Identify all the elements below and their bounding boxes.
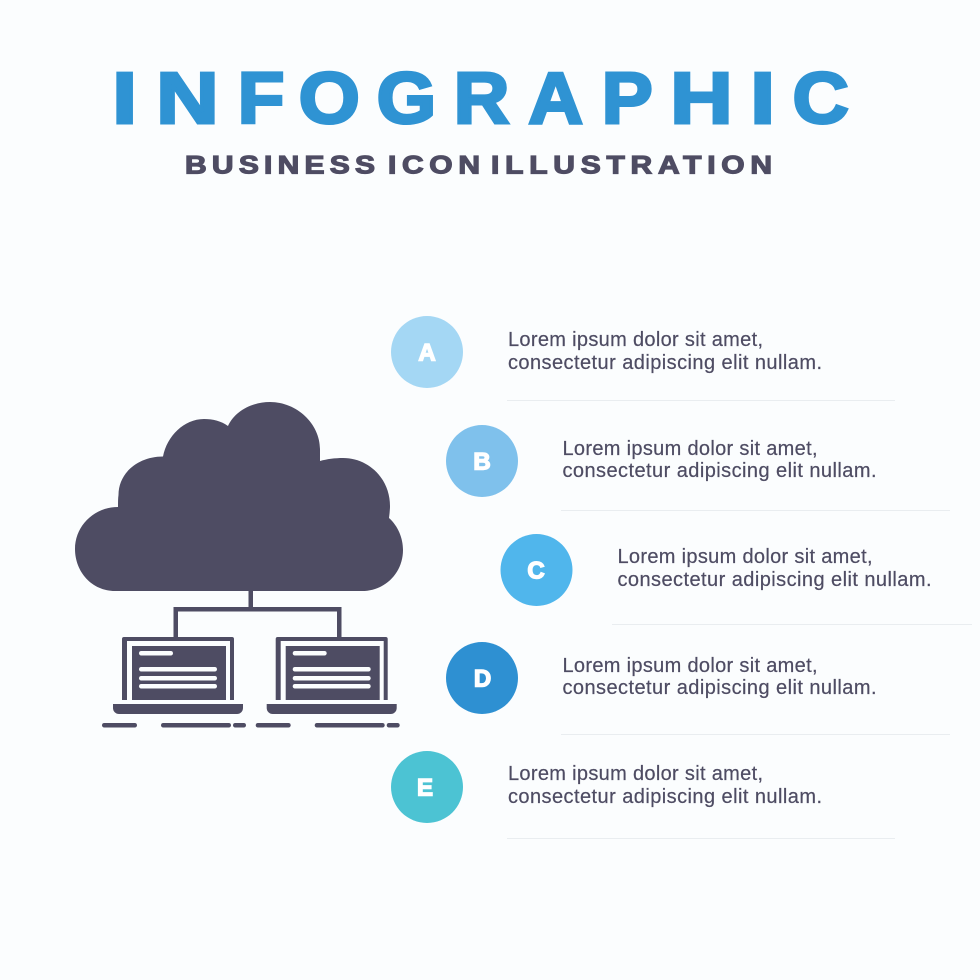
item B: consectetur adipiscing elit nullam. xyxy=(562,460,876,482)
item B xyxy=(446,425,950,511)
item C: consectetur adipiscing elit nullam. xyxy=(618,569,932,591)
item D xyxy=(446,642,950,735)
icon: cloud network with two laptops xyxy=(75,402,403,728)
item B: B xyxy=(473,448,491,476)
item E: consectetur adipiscing elit nullam. xyxy=(508,786,822,808)
item C xyxy=(500,534,972,625)
subtitle: ILLUSTRATION xyxy=(491,151,772,179)
item D: D xyxy=(474,666,491,692)
item B: Lorem ipsum dolor sit amet, xyxy=(562,438,818,460)
title: N xyxy=(156,58,219,138)
title xyxy=(112,58,849,139)
laptop: left xyxy=(102,637,246,728)
item A: Lorem ipsum dolor sit amet, xyxy=(508,329,763,351)
title: R xyxy=(454,58,509,138)
title: O xyxy=(299,58,360,138)
title: F xyxy=(238,58,284,139)
subtitle xyxy=(185,151,772,179)
item D: Lorem ipsum dolor sit amet, xyxy=(562,655,818,677)
item C: C xyxy=(527,558,545,584)
item D: consectetur adipiscing elit nullam. xyxy=(562,677,876,699)
item A xyxy=(391,316,895,401)
item A: consectetur adipiscing elit nullam. xyxy=(508,352,822,374)
title: C xyxy=(793,58,849,138)
title: A xyxy=(528,58,583,139)
title: I xyxy=(112,59,137,139)
title: P xyxy=(602,58,653,139)
title: G xyxy=(377,58,436,139)
item E: Lorem ipsum dolor sit amet, xyxy=(508,763,763,785)
subtitle: ICON xyxy=(388,151,480,179)
title: H xyxy=(670,58,733,138)
laptop: right xyxy=(256,637,400,728)
connector lines xyxy=(174,590,342,637)
subtitle: BUSINESS xyxy=(185,151,375,179)
icon: cloud xyxy=(75,402,403,591)
item E xyxy=(391,751,895,839)
item C: Lorem ipsum dolor sit amet, xyxy=(618,546,872,568)
title: I xyxy=(750,59,775,139)
item E: E xyxy=(417,774,433,802)
item A: A xyxy=(418,340,436,366)
